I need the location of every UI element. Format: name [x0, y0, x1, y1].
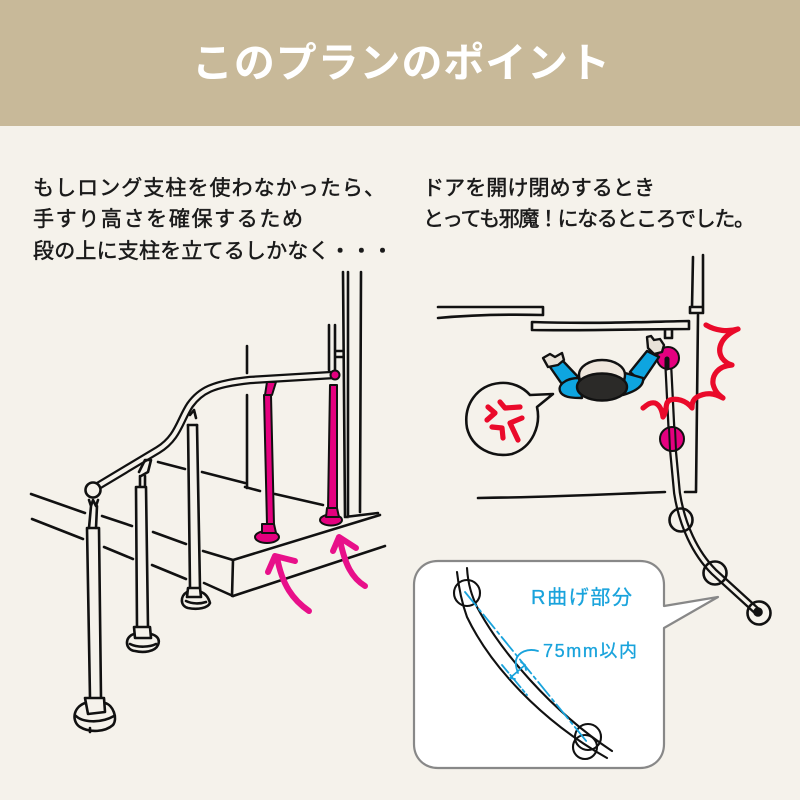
person seen from above [543, 336, 664, 400]
dash-dot measurement lines [465, 592, 587, 742]
title banner [0, 0, 800, 126]
handrail [98, 375, 333, 486]
post 1 [75, 482, 115, 732]
highlighted support ball 2 [660, 427, 684, 451]
pink arrow 2 [333, 537, 365, 586]
title banner: このプランのポイント [192, 40, 610, 86]
post 3 [182, 410, 210, 609]
left explanatory text: もしロング支柱を使わなかったら、 [33, 177, 385, 200]
post 2 [127, 460, 159, 652]
floor and step lines [31, 272, 385, 596]
highlighted post 4 [255, 382, 279, 543]
label: R bend: R曲げ部分 [531, 586, 632, 609]
curved rail [668, 360, 759, 613]
left explanatory text: 手すり高さを確保するため [33, 208, 303, 231]
callout: R bend detail [414, 561, 718, 768]
left explanatory text: 段の上に支柱を立てるしかなく・・・ [33, 240, 393, 263]
right explanatory text: ドアを開け閉めするとき [423, 177, 655, 200]
right explanatory text [423, 177, 755, 231]
pink arrow 1 [268, 556, 309, 611]
walls and door [438, 255, 703, 498]
door plan view illustration [438, 255, 770, 624]
highlighted post 5 [320, 370, 342, 526]
left explanatory text [33, 177, 393, 263]
highlighted support ball 1 [657, 347, 679, 369]
bent rail drawing [454, 568, 612, 759]
right explanatory text: とっても邪魔！になるところでした。 [423, 208, 755, 231]
outline support balls [670, 508, 770, 624]
angry speech bubble [466, 383, 553, 455]
stair handrail illustration [31, 272, 385, 732]
red burst lines [643, 325, 738, 417]
label: within 75 mm: 75mm以内 [543, 641, 637, 661]
